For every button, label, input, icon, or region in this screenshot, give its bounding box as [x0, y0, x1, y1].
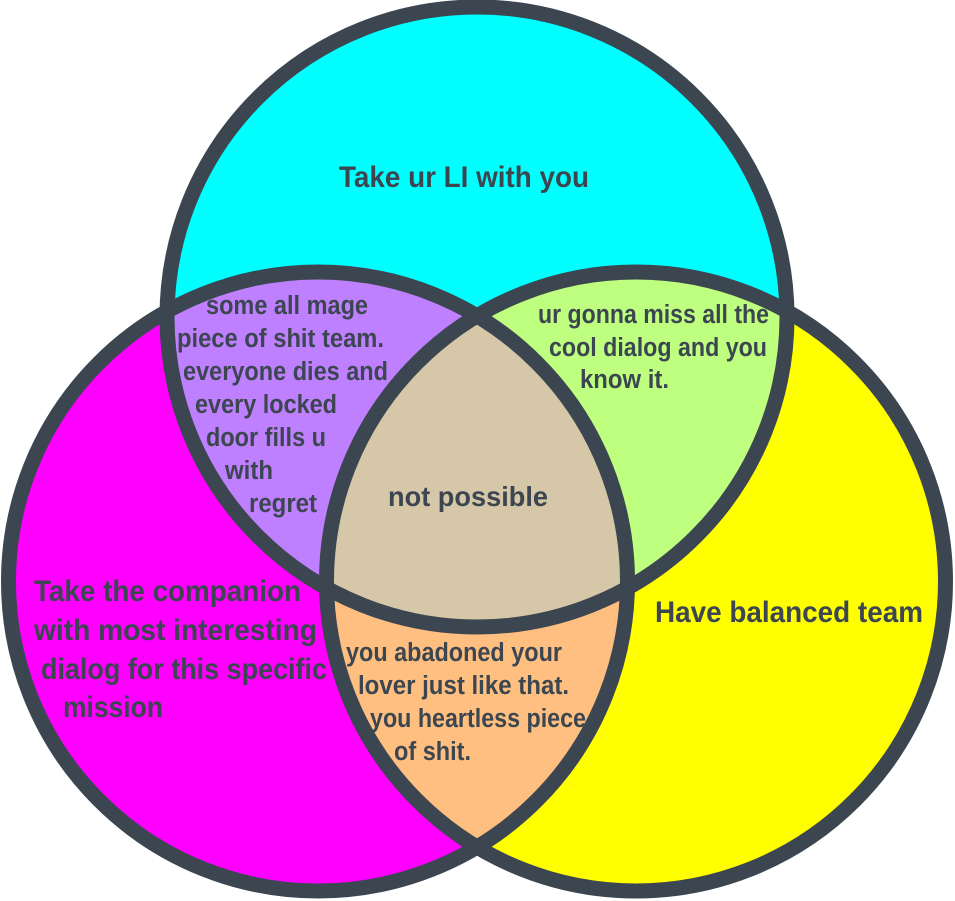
overlap: centre tan: [334, 325, 620, 620]
label: top circle: Take ur LI with you: [339, 161, 589, 194]
circle fill: left magenta: [8, 272, 628, 891]
label: left circle: dialog for this specific: [41, 653, 327, 686]
label: right circle: Have balanced team: [655, 596, 923, 629]
circle fill: top cyan: [167, 7, 787, 627]
label: top-left overlap: [177, 292, 388, 518]
label: top-right overlap: cool dialog and you: [549, 334, 767, 362]
label: top-left overlap: some all mage: [206, 292, 368, 320]
label: top-left overlap: regret: [249, 490, 317, 518]
label: top-left overlap: with: [224, 457, 273, 485]
label: centre: not possible: [388, 481, 548, 512]
circle fill: right yellow: [326, 272, 946, 891]
label: top-right overlap: know it.: [580, 366, 669, 394]
label: top-right overlap: [538, 301, 769, 394]
label: bottom overlap: of shit.: [394, 738, 471, 766]
label: left circle: mission: [63, 691, 163, 724]
overlap: top and left purple: [174, 280, 462, 575]
label: top-left overlap: piece of shit team.: [177, 325, 384, 353]
label: top-right overlap: ur gonna miss all the: [538, 301, 769, 329]
label: bottom overlap: lover just like that.: [358, 672, 569, 700]
label: top-left overlap: door fills u: [206, 424, 326, 452]
label: left circle: [33, 575, 327, 724]
label: bottom overlap: [346, 639, 586, 766]
label: left circle: with most interesting: [33, 614, 317, 647]
overlap: left and right orange: [334, 600, 620, 838]
label: bottom overlap: you abadoned your: [346, 639, 562, 667]
label: top-left overlap: everyone dies and: [183, 358, 388, 386]
label: top-left overlap: every locked: [195, 391, 337, 419]
label: bottom overlap: you heartless piece: [370, 705, 586, 733]
overlap: top and right green: [492, 280, 780, 575]
label: left circle: Take the companion: [34, 575, 301, 608]
